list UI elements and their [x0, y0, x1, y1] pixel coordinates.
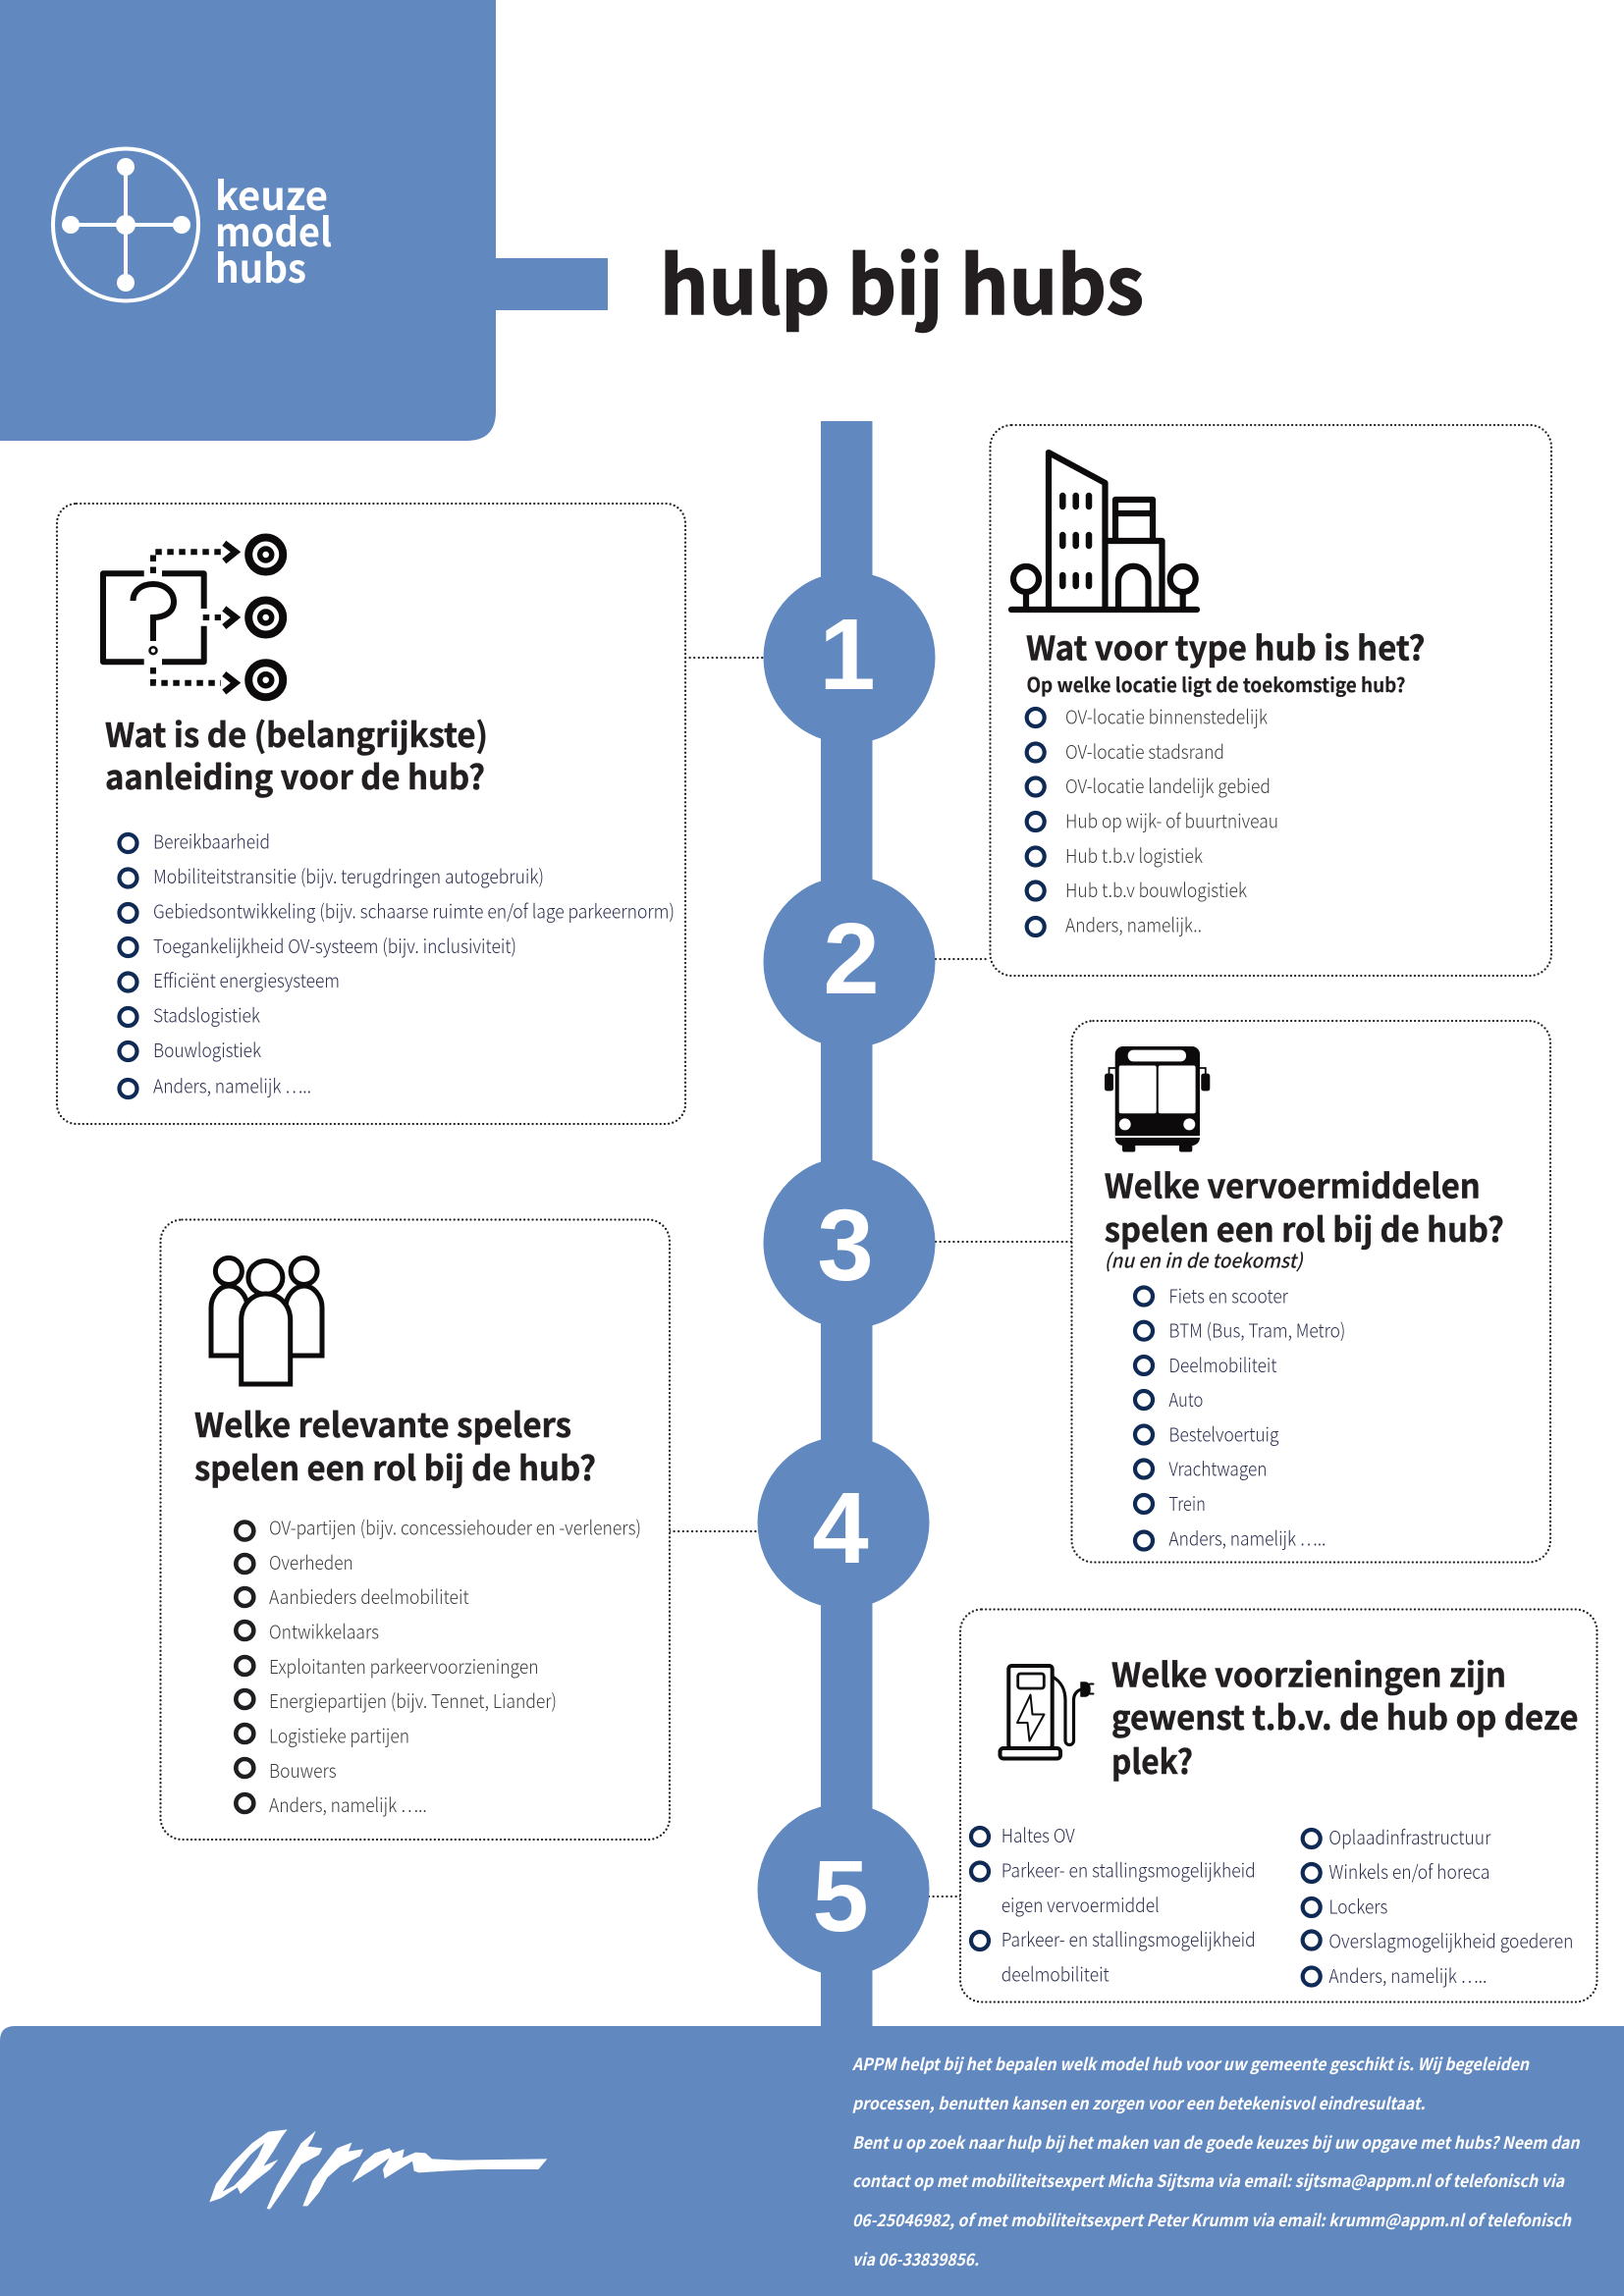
timeline spine — [821, 421, 872, 2031]
options list: left column: Haltes OV — [1001, 1820, 1075, 1848]
options list: right column: Anders, namelijk ….. — [1328, 1960, 1487, 1989]
step 2 marker: 2 — [823, 902, 880, 1015]
step 3 marker — [764, 1156, 935, 1329]
panel: voorzieningen — [960, 1610, 1597, 2002]
options list: right column: Overslagmogelijkheid goederen — [1328, 1926, 1573, 1953]
options list: Auto — [1168, 1384, 1203, 1413]
options list: Energiepartijen (bijv. Tennet, Liander) — [269, 1685, 557, 1714]
connector 3 — [936, 1241, 1072, 1243]
options list: Bereikbaarheid — [153, 827, 270, 854]
heading: plek? — [1111, 1735, 1193, 1784]
options list — [120, 827, 675, 1099]
options list: OV-partijen (bijv. concessiehouder en -verleners) — [269, 1512, 641, 1541]
heading — [194, 1399, 596, 1490]
step 4 marker — [758, 1437, 929, 1608]
connector 4 — [670, 1530, 758, 1532]
heading — [1105, 1160, 1504, 1252]
options list: Ontwikkelaars — [269, 1616, 379, 1645]
options list: Anders, namelijk.. — [1065, 909, 1202, 938]
subheading: Op welke locatie ligt de toekomstige hub? — [1027, 669, 1406, 698]
footer text: contact op met mobiliteitsexpert Micha Sijtsma via email: sijtsma@appm.nl of telefonisch via — [852, 2167, 1565, 2192]
options list: Hub t.b.v bouwlogistiek — [1065, 875, 1247, 903]
connector 1 — [685, 657, 764, 659]
heading: Welke vervoermiddelen — [1105, 1160, 1481, 1207]
heading: Welke voorzieningen zijn — [1111, 1649, 1506, 1696]
options list: Efficiënt energiesysteem — [153, 965, 340, 993]
footer band — [0, 2026, 1624, 2296]
footer text — [851, 2051, 1581, 2270]
footer text: Bent u op zoek naar hulp bij het maken van de goede keuzes bij uw opgave met hubs? Neem dan — [852, 2129, 1581, 2154]
options list: OV-locatie landelijk gebied — [1065, 771, 1271, 799]
options list: OV-locatie binnenstedelijk — [1065, 701, 1268, 730]
logo wordmark: model — [215, 201, 332, 258]
options list: Bouwers — [269, 1755, 337, 1784]
options list: Bestelvoertuig — [1168, 1419, 1279, 1447]
options list: left column: eigen vervoermiddel — [1001, 1890, 1160, 1918]
options list: left column: Parkeer- en stallingsmogelijkheid — [1001, 1855, 1256, 1883]
options list: Gebiedsontwikkeling (bijv. schaarse ruimte en/of lage parkeernorm) — [153, 895, 675, 925]
subheading: (nu en in de toekomst) — [1105, 1245, 1304, 1274]
footer text: processen, benutten kansen en zorgen voor een betekenisvol eindresultaat. — [852, 2090, 1426, 2114]
logo wordmark: keuze — [215, 165, 328, 222]
options list — [1027, 701, 1278, 938]
header block — [0, 0, 608, 441]
heading — [105, 709, 488, 799]
heading: Wat is de (belangrijkste) — [105, 709, 488, 757]
options list: Fiets en scooter — [1168, 1280, 1289, 1309]
icon: buildings and trees — [1011, 453, 1197, 610]
options list: left column: Parkeer- en stallingsmogelijkheid — [1001, 1924, 1256, 1952]
options list: right column — [1303, 1822, 1573, 1989]
options list: right column: Lockers — [1328, 1891, 1388, 1920]
panel: vervoermiddelen — [1072, 1021, 1550, 1563]
icon: bus — [1105, 1046, 1210, 1152]
options list: Trein — [1168, 1488, 1206, 1517]
icon: charging station — [1000, 1666, 1094, 1759]
step 3 marker: 3 — [817, 1189, 874, 1302]
step 2 marker — [764, 876, 935, 1048]
options list: Logistieke partijen — [269, 1720, 409, 1749]
options list: Hub t.b.v logistiek — [1065, 840, 1203, 869]
options list: Bouwlogistiek — [153, 1035, 261, 1063]
footer text: 06-25046982, of met mobiliteitsexpert Peter Krumm via email: krumm@appm.nl of telefonisch — [852, 2207, 1572, 2231]
options list: Deelmobiliteit — [1168, 1350, 1277, 1378]
logo wordmark: hubs — [215, 238, 306, 294]
options list: Hub op wijk- of buurtniveau — [1065, 805, 1278, 834]
options list: left column: deelmobiliteit — [1001, 1959, 1110, 1987]
logo: APPM signature — [209, 2129, 547, 2210]
options list: Stadslogistiek — [153, 999, 260, 1029]
heading: spelen een rol bij de hub? — [194, 1442, 596, 1490]
panel: type hub — [990, 425, 1551, 976]
footer text: APPM helpt bij het bepalen welk model hub voor uw gemeente geschikt is. Wij begeleiden — [851, 2051, 1530, 2075]
step 1 marker: 1 — [819, 598, 876, 711]
options list: BTM (Bus, Tram, Metro) — [1168, 1315, 1345, 1344]
panel: aanleiding — [57, 504, 685, 1124]
panel: spelers — [161, 1219, 670, 1840]
options list: Aanbieders deelmobiliteit — [269, 1581, 469, 1610]
icon: three people — [211, 1258, 322, 1384]
options list: Anders, namelijk ….. — [1168, 1523, 1326, 1551]
options list — [236, 1512, 641, 1818]
icon: keuzemodel hubs logo — [53, 149, 198, 300]
heading — [1111, 1649, 1579, 1784]
options list — [1135, 1280, 1345, 1551]
step 5 marker: 5 — [812, 1840, 869, 1952]
options list: left column — [971, 1820, 1256, 1987]
options list: Exploitanten parkeervoorzieningen — [269, 1651, 539, 1680]
options list: OV-locatie stadsrand — [1065, 736, 1224, 765]
title: hulp bij hubs — [660, 223, 1144, 338]
footer text: via 06-33839856. — [852, 2246, 979, 2270]
step 5 marker — [758, 1804, 929, 1975]
heading: gewenst t.b.v. de hub op deze — [1111, 1691, 1579, 1739]
connector 2 — [936, 958, 990, 960]
logo wordmark — [215, 165, 332, 294]
heading: spelen een rol bij de hub? — [1105, 1203, 1504, 1252]
options list: Anders, namelijk ….. — [269, 1789, 427, 1818]
options list: right column: Winkels en/of horeca — [1328, 1856, 1489, 1885]
options list: Vrachtwagen — [1168, 1453, 1267, 1482]
heading: aanleiding voor de hub? — [105, 751, 485, 799]
heading: Welke relevante spelers — [194, 1399, 571, 1447]
icon: question with targets — [103, 538, 283, 697]
options list: Overheden — [269, 1547, 353, 1575]
options list: Toegankelijkheid OV-systeem (bijv. inclusiviteit) — [153, 931, 516, 959]
step 4 marker: 4 — [812, 1471, 869, 1584]
step 1 marker — [764, 571, 935, 744]
connector 5 — [929, 1896, 961, 1897]
options list: right column: Oplaadinfrastructuur — [1328, 1822, 1491, 1850]
options list: Anders, namelijk ….. — [153, 1070, 311, 1099]
options list: Mobiliteitstransitie (bijv. terugdringen autogebruik) — [153, 861, 544, 889]
heading: Wat voor type hub is het? — [1026, 622, 1426, 669]
